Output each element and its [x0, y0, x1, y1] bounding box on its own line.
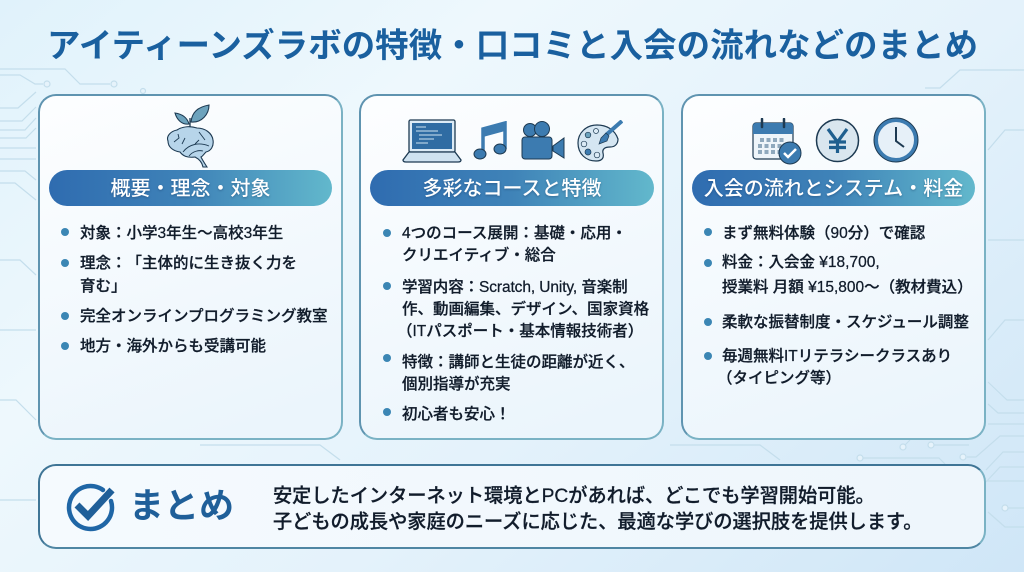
- icon: brain with sprout: [167, 104, 214, 168]
- icon: clock: [874, 118, 918, 162]
- heading pill: overview: 概要・理念・対象: [110, 178, 270, 200]
- text block: overview list: 育む」: [80, 278, 127, 295]
- text block: courses list: [383, 224, 649, 423]
- icon: calendar: [752, 118, 802, 164]
- text block: overview list: 完全オンラインプログラミング教室: [80, 308, 328, 325]
- summary text: 安定したインターネット環境とPCがあれば、どこでも学習開始可能。: [273, 486, 875, 507]
- text block: enrollment list: （タイピング等）: [717, 370, 841, 387]
- heading pill: courses: [370, 170, 654, 206]
- text block: overview list: 対象：小学3年生～高校3年生: [80, 225, 283, 242]
- text block: enrollment list: 毎週無料ITリテラシークラスあり: [722, 348, 952, 365]
- text block: courses list: 作、動画編集、デザイン、国家資格: [402, 301, 649, 318]
- icon: music note: [474, 121, 507, 160]
- icon: check mark: [66, 484, 114, 532]
- text block: courses list: 学習内容：Scratch, Unity, 音楽制: [402, 279, 628, 296]
- text block: courses list: （ITパスポート・基本情報技術者）: [397, 323, 643, 340]
- text block: courses list: 初心者も安心！: [402, 406, 511, 423]
- panel: summary: [38, 464, 986, 549]
- heading pill: enrollment: [692, 170, 975, 206]
- heading pill: overview: [49, 170, 332, 206]
- text block: enrollment list: まず無料体験（90分）で確認: [722, 225, 925, 242]
- panel: enrollment: [681, 94, 986, 440]
- panel: courses: [359, 94, 664, 440]
- icon: yen coin: [816, 118, 860, 162]
- heading pill: enrollment: 入会の流れとシステム・料金: [704, 178, 963, 200]
- text block: overview list: 地方・海外からも受講可能: [80, 338, 266, 355]
- text block: enrollment list: 柔軟な振替制度・スケジュール調整: [722, 314, 969, 331]
- title: アイティーンズラボの特徴・口コミと入会の流れなどのまとめ: [47, 28, 978, 65]
- summary label: まとめ: [129, 487, 234, 526]
- panel: overview: [38, 94, 343, 440]
- text block: enrollment list: 授業料 月額 ¥15,800～（教材費込）: [722, 279, 973, 296]
- text block: courses list: クリエイティブ・総合: [402, 247, 556, 264]
- icon: palette: [577, 120, 623, 162]
- icon: laptop: [402, 119, 462, 163]
- summary text: 子どもの成長や家庭のニーズに応じた、最適な学びの選択肢を提供します。: [273, 512, 922, 533]
- text block: enrollment list: 料金：入会金 ¥18,700,: [722, 254, 880, 271]
- text block: courses list: 個別指導が充実: [402, 376, 511, 393]
- text block: courses list: 4つのコース展開：基礎・応用・: [402, 225, 627, 242]
- text block: enrollment list: [704, 224, 973, 387]
- heading pill: courses: 多彩なコースと特徴: [422, 178, 602, 200]
- icon: video camera: [522, 121, 564, 160]
- text block: overview list: [61, 224, 328, 355]
- text block: overview list: 理念：「主体的に生き抜く力を: [80, 255, 297, 272]
- summary text: [273, 485, 922, 533]
- text block: courses list: 特徴：講師と生徒の距離が近く、: [402, 354, 635, 371]
